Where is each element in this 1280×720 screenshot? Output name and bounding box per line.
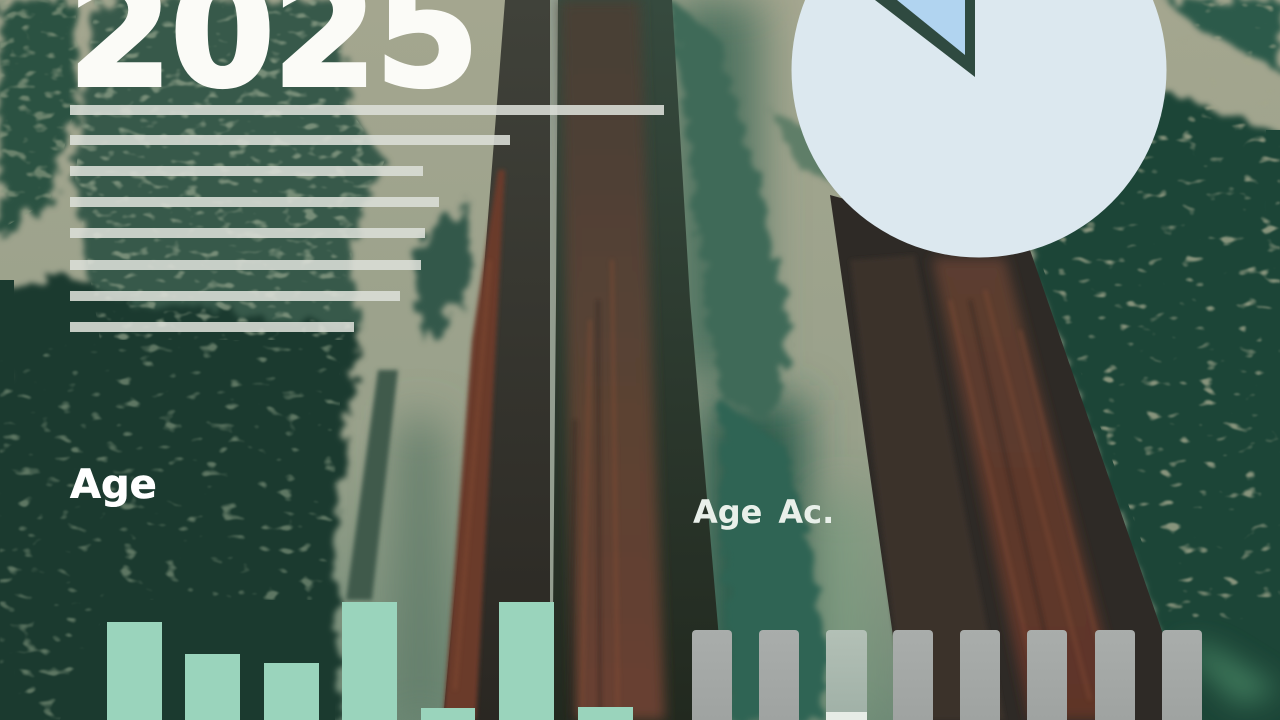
soft fog tones [400,0,860,720]
leaf dapples [0,0,385,340]
bar chart: right [692,630,1202,720]
distant thin trunk [346,370,398,600]
redwood trunks [443,0,1165,720]
bar chart: left [107,602,633,720]
bark streaks [455,260,1110,720]
text placeholder lines [70,105,664,332]
heading: right chart: Age Ac. [693,493,834,531]
pie gap [875,0,975,77]
heading: left chart: Age [70,462,157,508]
pie chart [792,0,1166,258]
bottom-right mossy light [1175,640,1280,705]
pie slice [897,0,965,55]
